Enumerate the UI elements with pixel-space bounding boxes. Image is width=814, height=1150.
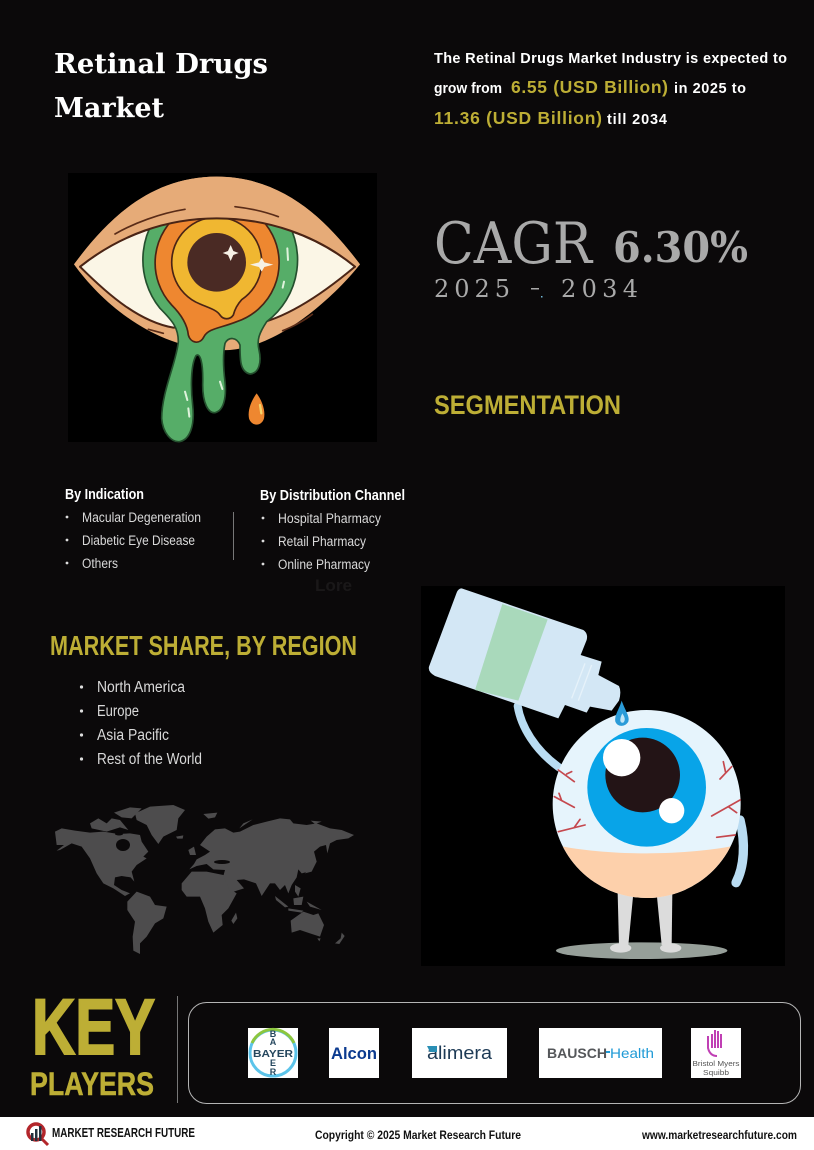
segment list: by distribution channel: Hospital Pharmacy [278,511,381,526]
segment list: by distribution channel: By Distribution Channel [260,487,405,504]
key players heading [30,982,155,1102]
key players heading: PLAYERS [30,1066,154,1102]
market forecast text: 6.55 (USD Billion) [511,77,668,97]
logo: bayer: E [270,1058,276,1068]
upper lid over iris [74,177,360,267]
new zealand [335,933,345,944]
arms [518,706,559,767]
segment list: by distribution channel [260,487,405,572]
logo: bayer [248,1028,298,1078]
segment list: by distribution channel: Online Pharmacy [278,557,370,572]
north america [55,828,148,896]
greenland [135,805,185,844]
islands [176,819,322,855]
region list [80,679,202,768]
segment list: by indication [65,486,201,571]
red veins [554,762,740,837]
logo: bausch health: BAUSCH [547,1045,607,1061]
logo: alimera: alimera [427,1043,493,1063]
madagascar [231,913,237,924]
south america [127,892,167,954]
CAGR: 2034 [561,275,638,303]
eyeball body [553,710,741,898]
logo: bristol myers squibb: Bristol Myers [692,1059,740,1068]
segment list: by indication: Diabetic Eye Disease [82,533,195,548]
market forecast text [434,51,787,128]
bottle ridges [572,663,592,701]
logo: bristol myers squibb [691,1028,741,1078]
footer [0,1117,814,1150]
drip highlights [185,248,288,417]
segment list: by indication: Macular Degeneration [82,510,201,525]
green iris ring and drips [143,182,298,442]
region list: Rest of the World [97,751,202,768]
lash lines [115,207,312,333]
market share heading: MARKET SHARE, BY REGION [50,630,357,661]
logo: bayer: A [270,1037,277,1047]
segmentation heading: SEGMENTATION [434,390,621,420]
logo: alcon: Alcon [331,1045,377,1063]
logo: bausch health [539,1028,662,1078]
world map [55,805,354,954]
CAGR: 6.30% [613,223,748,272]
pupil [605,738,680,812]
title [54,48,268,124]
CAGR: 2025 [434,275,510,303]
region list: Europe [97,703,139,720]
eyelid [74,177,360,350]
logo: bayer: B [270,1029,277,1039]
logo: bausch health: Health [610,1045,654,1061]
title: Retinal Drugs [54,48,268,80]
key players panel [188,1002,800,1104]
logo: alimera [412,1028,507,1078]
footer: Copyright © 2025 Market Research Future [315,1128,521,1142]
eurasia [189,818,354,896]
highlights [603,739,640,776]
falling drop [249,393,264,425]
market forecast text: The Retinal Drugs Market Industry is expected to [434,51,787,67]
pupil [187,233,246,292]
arctic islands [90,818,128,832]
illustration: eyeball with eye drops [421,586,785,966]
africa [182,872,237,933]
iceland [203,813,217,819]
title: Market [54,92,164,124]
logo: bayer: R [270,1067,277,1077]
illustration: dripping eye [68,173,377,442]
market forecast text: in 2025 to [674,81,746,97]
drop [615,701,629,726]
iris [587,728,706,847]
shadow [556,942,727,959]
peach lower body [562,846,731,898]
logo: bristol myers squibb: Squibb [703,1068,729,1077]
legs [618,893,633,945]
region list: Asia Pacific [97,727,169,744]
market forecast text: grow from [434,81,502,97]
australia [291,912,324,937]
market forecast text: till 2034 [607,112,667,128]
logo: alcon [329,1028,379,1078]
region list: North America [97,679,185,696]
logo: bayer: BAYER [253,1048,293,1060]
segment list: by distribution channel: Retail Pharmacy [278,534,366,549]
CAGR [434,211,748,303]
eye white [80,218,355,328]
bottle [429,588,620,718]
sparkles [223,245,239,261]
segment list: by indication: Others [82,556,118,571]
market forecast text: 11.36 (USD Billion) [434,108,602,128]
bottle label [475,604,548,701]
orange iris [155,201,279,342]
faint placeholder text: Lore [315,576,352,595]
segment list: by indication: By Indication [65,486,144,503]
key players heading: KEY [32,982,155,1071]
footer logo icon [28,1124,48,1145]
footer: MARKET RESEARCH FUTURE [52,1126,195,1140]
yellow ring [172,217,262,319]
CAGR: CAGR [434,211,594,277]
hudson bay and seas cut-outs [115,832,230,864]
